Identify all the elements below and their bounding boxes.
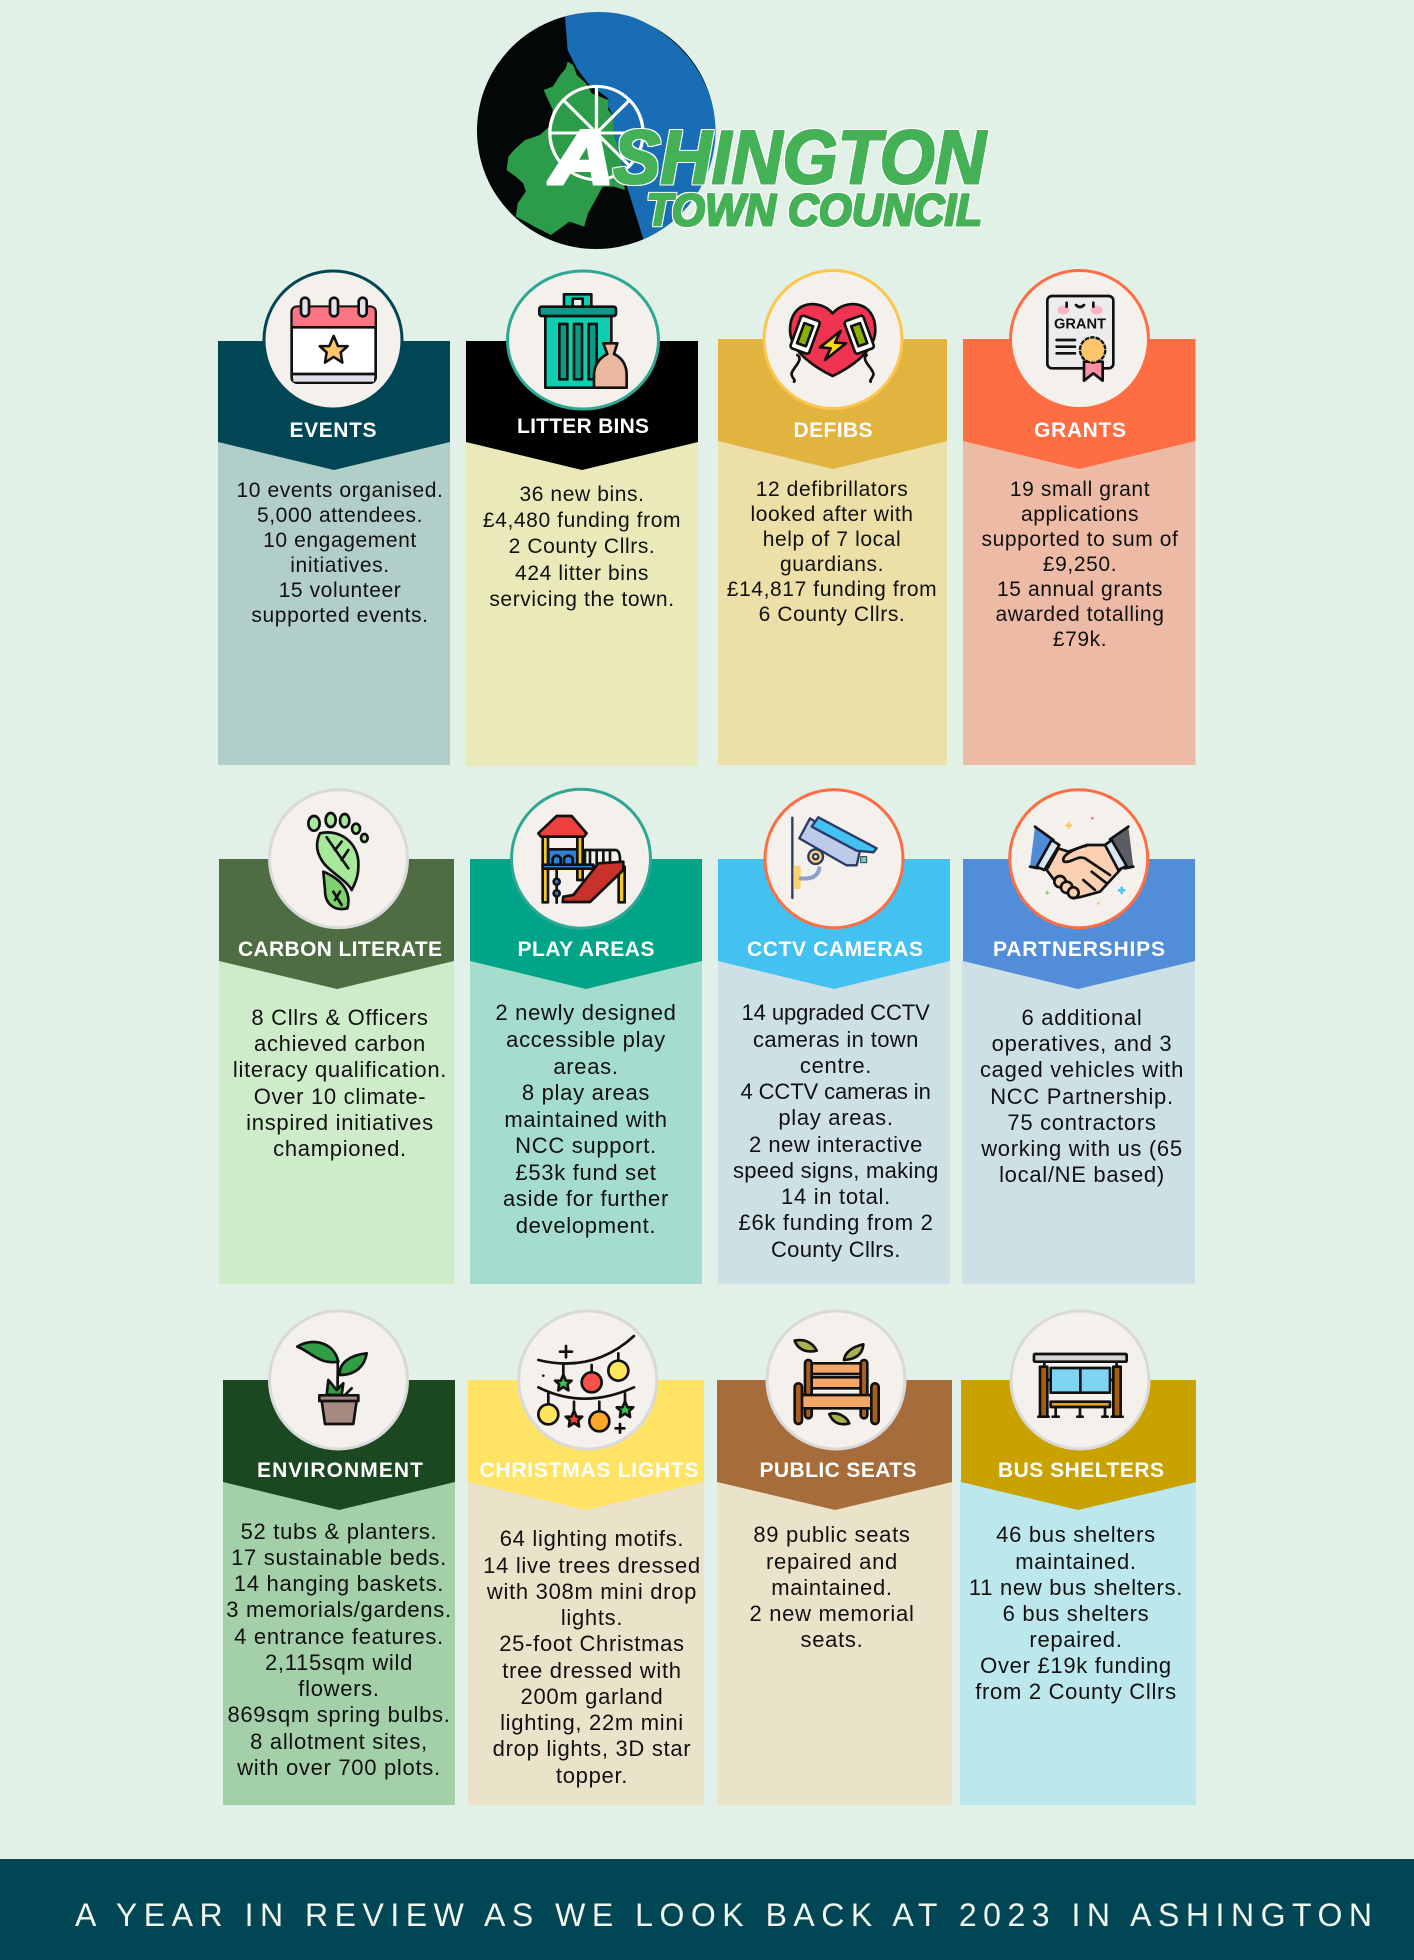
icon: potted plant [297, 1342, 367, 1424]
panel text: working with us (65 [980, 1136, 1183, 1161]
icon circle [1011, 1311, 1149, 1449]
logo: Ashington Town Council [477, 12, 988, 249]
panel text: 10 events organised. [237, 479, 443, 502]
panel text: 8 Cllrs & Officers [251, 1005, 429, 1030]
panel: events [218, 271, 450, 765]
panel text: Over 10 climate- [254, 1084, 426, 1109]
panel text: 6 bus shelters [1003, 1601, 1149, 1626]
panel: litter bins [466, 271, 698, 766]
icon circle [764, 270, 902, 408]
panel text: cameras in town [753, 1027, 919, 1052]
heading: CCTV CAMERAS [747, 938, 923, 961]
panel text: operatives, and 3 [992, 1031, 1172, 1056]
footer banner [0, 1859, 1414, 1960]
icon circle [1010, 790, 1148, 928]
panel: grants [963, 270, 1196, 765]
icon: bus shelter [1034, 1354, 1127, 1417]
panel banner [218, 341, 450, 470]
heading: PARTNERSHIPS [993, 938, 1165, 961]
icon circle [508, 271, 658, 409]
panel text: 2 County Cllrs. [509, 535, 655, 558]
panel banner [961, 1380, 1196, 1510]
panel text: servicing the town. [489, 588, 675, 611]
panel text: 46 bus shelters [996, 1522, 1156, 1547]
panel banner [717, 1380, 952, 1510]
panel body [223, 1480, 455, 1805]
icon: grant certificate: GRANT [1054, 317, 1106, 333]
panel text: play areas. [778, 1105, 894, 1130]
panel body [718, 439, 947, 765]
panel text: 10 engagement [263, 529, 417, 552]
heading: PUBLIC SEATS [760, 1459, 916, 1482]
panel text: accessible play [506, 1027, 666, 1052]
panel banner [468, 1380, 704, 1510]
heading: CHRISTMAS LIGHTS [480, 1459, 698, 1482]
panel text: County Cllrs. [771, 1237, 901, 1262]
heading: BUS SHELTERS [998, 1459, 1164, 1482]
panel text: local/NE based) [999, 1162, 1165, 1187]
panel text: areas. [553, 1054, 619, 1079]
panel text: 4 CCTV cameras in [740, 1079, 932, 1104]
panel text: initiatives. [290, 554, 390, 577]
panel: christmas lights [468, 1311, 704, 1805]
panel text: flowers. [298, 1676, 380, 1701]
panel: defibs [718, 270, 947, 765]
icon circle [270, 790, 408, 928]
panel text: 6 additional [1022, 1005, 1142, 1030]
logo wordmark: SHINGTON [613, 115, 988, 200]
logo wordmark: TOWN COUNCIL [646, 185, 982, 236]
panel text: from 2 County Cllrs [975, 1679, 1177, 1704]
heading: GRANTS [1034, 419, 1126, 442]
panel text: NCC Partnership. [990, 1084, 1174, 1109]
heading: DEFIBS [794, 419, 872, 442]
panel text: 8 play areas [522, 1080, 650, 1105]
panel text: maintained with [504, 1107, 668, 1132]
footer text: A YEAR IN REVIEW AS WE LOOK BACK AT 2023 IN ASHINGTON [75, 1897, 1372, 1933]
panel body [962, 959, 1195, 1284]
icon circle [519, 1311, 657, 1449]
heading: ENVIRONMENT [257, 1459, 423, 1482]
panel body [468, 1480, 704, 1805]
icon: bench with leaves [795, 1340, 879, 1424]
panel text: 15 volunteer [279, 579, 401, 602]
panel text: 2 newly designed [495, 1000, 677, 1025]
panel text: 5,000 attendees. [257, 504, 423, 527]
panel text: 2 new interactive [749, 1132, 923, 1157]
panel text: centre. [800, 1053, 872, 1078]
icon circle [1010, 270, 1148, 408]
panel text: maintained. [771, 1575, 893, 1600]
panel text: caged vehicles with [980, 1057, 1184, 1082]
panel banner [963, 859, 1195, 989]
panel: play areas [470, 789, 702, 1284]
panel text: £79k. [1053, 628, 1107, 651]
icon: festive baubles [538, 1336, 634, 1433]
panel body [219, 959, 454, 1284]
panel banner [470, 859, 702, 989]
panel banner [718, 859, 950, 989]
heading: PLAY AREAS [518, 938, 654, 961]
panel text: £6k funding from 2 [738, 1210, 934, 1235]
panel text: with over 700 plots. [236, 1755, 441, 1780]
panel text: looked after with [750, 503, 914, 526]
panel text: 52 tubs & planters. [241, 1519, 437, 1544]
panel banner [466, 341, 698, 470]
logo disc [477, 12, 716, 249]
panel banner [223, 1380, 455, 1510]
panel text: 869sqm spring bulbs. [227, 1702, 451, 1727]
icon: calendar [292, 298, 376, 383]
panel text: supported events. [251, 604, 429, 627]
panel text: with 308m mini drop [486, 1579, 697, 1604]
panel text: 14 hanging baskets. [234, 1571, 444, 1596]
icon: leaf footprint [308, 813, 368, 909]
panel text: 89 public seats [753, 1522, 911, 1547]
panel: public seats [717, 1311, 952, 1805]
icon: heart defibrillator [790, 304, 875, 382]
panel text: 11 new bus shelters. [969, 1575, 1183, 1600]
panel text: maintained. [1015, 1549, 1137, 1574]
icon circle [264, 271, 402, 409]
panel text: championed. [273, 1136, 407, 1161]
panel text: repaired and [766, 1549, 898, 1574]
panel banner [963, 339, 1196, 469]
panel body [718, 959, 950, 1284]
panel text: inspired initiatives [246, 1110, 434, 1135]
panel text: 25-foot Christmas [499, 1631, 685, 1656]
icon: handshake [1030, 817, 1133, 905]
panel text: 64 lighting motifs. [500, 1526, 684, 1551]
panel text: repaired. [1029, 1627, 1123, 1652]
panel: carbon literate [219, 790, 454, 1284]
icon: litter bin [539, 294, 627, 388]
panel text: seats. [801, 1627, 863, 1652]
panel text: achieved carbon [254, 1031, 426, 1056]
panel text: topper. [556, 1763, 628, 1788]
panel body [466, 440, 698, 766]
panel body [963, 439, 1196, 765]
panel text: 19 small grant [1010, 478, 1150, 501]
panel text: 200m garland [521, 1684, 663, 1709]
panel text: £14,817 funding from [727, 578, 937, 601]
panel text: tree dressed with [502, 1658, 682, 1683]
icon circle [512, 789, 650, 928]
icon circle [270, 1311, 408, 1449]
panel text: 17 sustainable beds. [231, 1545, 447, 1570]
panel text: 4 entrance features. [234, 1624, 444, 1649]
panel text: guardians. [780, 553, 884, 576]
panel text: literacy qualification. [233, 1057, 447, 1082]
panel text: 3 memorials/gardens. [226, 1597, 452, 1622]
panel text: 15 annual grants [997, 578, 1163, 601]
panel: bus shelters [960, 1311, 1196, 1805]
panel text: aside for further [503, 1186, 669, 1211]
panel text: speed signs, making [733, 1158, 939, 1183]
panel text: lighting, 22m mini [500, 1710, 684, 1735]
heading: CARBON LITERATE [238, 938, 442, 961]
panel text: Over £19k funding [980, 1653, 1172, 1678]
logo wordmark [548, 115, 988, 236]
panel text: awarded totalling [996, 603, 1164, 626]
panel: cctv cameras [718, 790, 950, 1284]
panel text: 8 allotment sites, [250, 1729, 428, 1754]
icon: grant certificate [1047, 296, 1113, 381]
panel text: 14 live trees dressed [483, 1553, 701, 1578]
panel text: lights. [561, 1605, 623, 1630]
panel body [960, 1480, 1196, 1805]
panel: environment [223, 1311, 455, 1805]
icon circle [765, 790, 903, 928]
panel banner [718, 339, 947, 469]
panel text: 2,115sqm wild [265, 1650, 413, 1675]
panel body [470, 959, 702, 1284]
panel text: 36 new bins. [519, 483, 645, 506]
panel text: 75 contractors [1007, 1110, 1157, 1135]
panel text: 14 in total. [781, 1184, 891, 1209]
icon: playground [538, 816, 625, 903]
panel text: 2 new memorial [749, 1601, 915, 1626]
logo wordmark: A [548, 115, 614, 200]
panel text: £4,480 funding from [483, 509, 681, 532]
heading: EVENTS [290, 419, 376, 442]
panel text [733, 1000, 939, 1262]
panel text: 6 County Cllrs. [759, 603, 905, 626]
panel text: drop lights, 3D star [493, 1736, 691, 1761]
panel body [717, 1480, 952, 1805]
heading: LITTER BINS [517, 415, 649, 438]
icon: cctv camera [792, 817, 877, 898]
panel text: supported to sum of [981, 528, 1179, 551]
pit wheel [550, 86, 643, 180]
panel text: NCC support. [515, 1133, 657, 1158]
panel text: £53k fund set [515, 1160, 657, 1185]
panel text: 12 defibrillators [756, 478, 908, 501]
panel text: 14 upgraded CCTV [742, 1000, 930, 1025]
panel text: development. [516, 1213, 656, 1238]
panel text: applications [1021, 503, 1139, 526]
panel banner [219, 859, 454, 989]
panel text: 424 litter bins [515, 562, 649, 585]
panel: partnerships [962, 790, 1195, 1284]
icon circle [767, 1311, 905, 1449]
panel body [218, 440, 450, 765]
panel text: help of 7 local [763, 528, 901, 551]
panel text: £9,250. [1043, 553, 1117, 576]
